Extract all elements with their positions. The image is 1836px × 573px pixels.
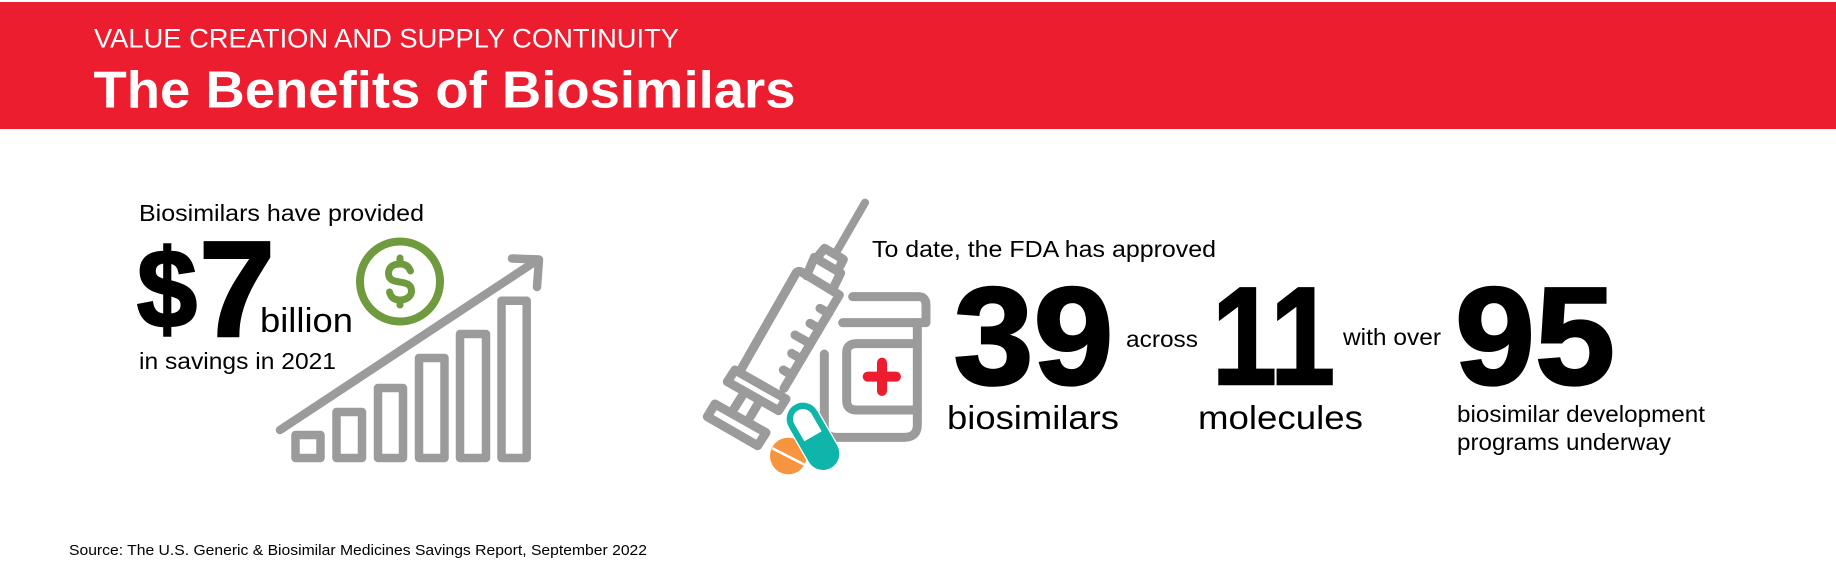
stat: 39 biosimilars: biosimilars (947, 399, 1119, 436)
stat: 95 programs: 95 (1455, 259, 1615, 414)
icon: syringe (707, 203, 865, 446)
FDA intro text: To date, the FDA has approved (872, 236, 1216, 262)
source note: Source: The U.S. Generic & Biosimilar Medicines Savings Report, September 2022 (69, 542, 647, 559)
panel: savings (137, 200, 539, 458)
stat: 95 programs: biosimilar development (1457, 401, 1706, 427)
savings figure: 7 (199, 213, 275, 365)
panel: FDA approvals (707, 203, 1706, 478)
icon: teal capsule (779, 395, 847, 478)
icon: medicine bottle (824, 297, 926, 437)
stat: 11 molecules: 11 (1212, 259, 1335, 414)
stat: 95 programs (1455, 259, 1706, 455)
icon: rising bar chart with arrow (280, 258, 539, 458)
stat: 11 molecules: molecules (1198, 399, 1363, 436)
billion label: billion (260, 302, 353, 340)
header kicker: VALUE CREATION AND SUPPLY CONTINUITY (94, 24, 679, 54)
header banner (0, 2, 1836, 129)
stat: 39 biosimilars: 39 (954, 259, 1114, 414)
savings figure (137, 213, 275, 365)
title: The Benefits of Biosimilars (94, 62, 796, 120)
savings intro text: Biosimilars have provided (139, 200, 424, 226)
icon: syringe, bottle and pills (707, 203, 926, 478)
with over label: with over (1342, 324, 1441, 350)
stat: 95 programs: programs underway (1457, 429, 1672, 455)
icon: orange tablet (770, 438, 807, 474)
across label: across (1126, 326, 1198, 352)
savings year text: in savings in 2021 (139, 348, 336, 374)
icon: dollar coin (360, 242, 440, 322)
savings figure: $ (137, 227, 197, 351)
